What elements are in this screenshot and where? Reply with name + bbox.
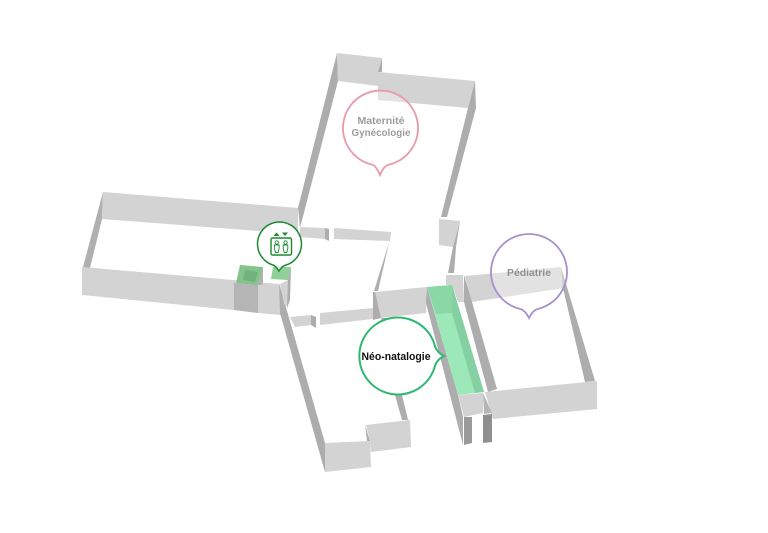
callout: Néo-natalogie	[359, 318, 444, 394]
callout: elevators	[258, 222, 302, 271]
callout: Pédiatrie: Pédiatrie	[507, 267, 551, 279]
pediatrics wing walls	[446, 267, 597, 419]
south-west wing walls	[279, 283, 427, 472]
callout: Maternité Gynécologie	[343, 91, 418, 175]
central corridor walls	[290, 227, 392, 328]
callout: Néo-natalogie: Néo-natalogie	[362, 351, 430, 363]
west wing walls	[82, 192, 298, 315]
callout: Pédiatrie	[491, 234, 567, 318]
callout: Maternité Gynécologie: Maternité	[358, 115, 405, 127]
icon: elevator	[271, 232, 292, 255]
elevators block	[234, 265, 291, 313]
maternity wing walls	[298, 53, 476, 273]
neonatal green corridor	[426, 285, 492, 445]
callout: Maternité Gynécologie: Gynécologie	[352, 127, 411, 139]
